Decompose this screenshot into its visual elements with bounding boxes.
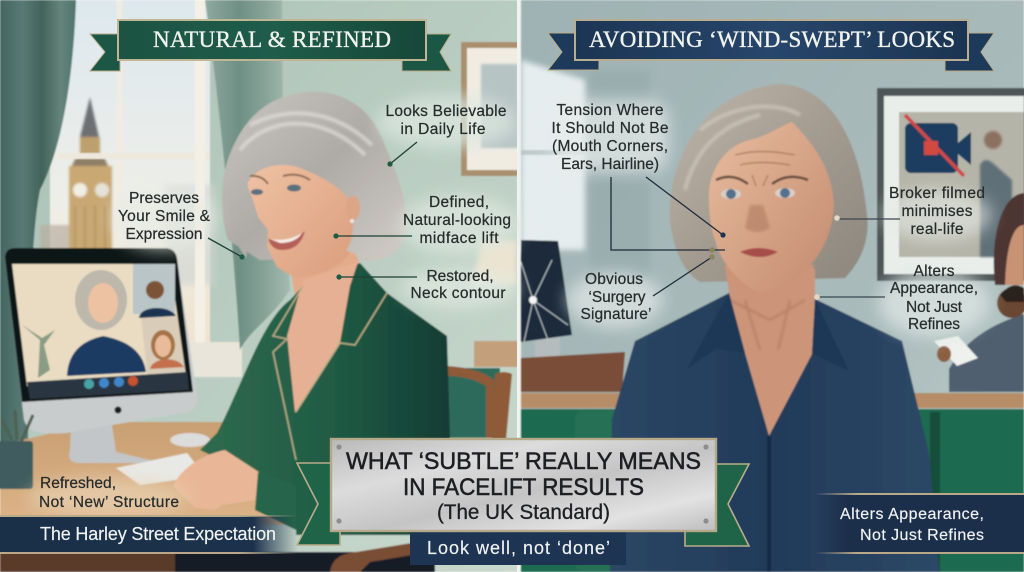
divider — [517, 0, 521, 572]
wooden rail — [521, 393, 1024, 408]
hair back — [670, 84, 868, 282]
navy shirt — [610, 293, 939, 572]
woman: natural result — [173, 92, 450, 535]
panel: natural and refined scene — [0, 0, 521, 572]
banner heading: NATURAL & REFINED — [153, 27, 391, 52]
label: surgery signature: Signature’ — [580, 306, 652, 323]
face — [246, 150, 361, 278]
chest skin — [287, 262, 358, 413]
label: neck contour: Neck contour — [410, 285, 506, 302]
label: surgery signature: ‘Surgery — [588, 289, 646, 306]
label: midface lift: Natural-looking — [403, 212, 511, 229]
main title: WHAT ‘SUBTLE’ REALLY MEANS — [346, 448, 701, 475]
chair back — [447, 366, 512, 440]
neck — [290, 245, 362, 330]
shirt collar — [687, 293, 849, 371]
panel: avoiding wind-swept scene — [521, 0, 1024, 572]
green sofa — [521, 409, 1024, 572]
eyes and brows — [716, 177, 808, 199]
label: surgery signature — [567, 254, 715, 328]
mouth — [740, 248, 778, 257]
icon: desktop monitor with video call — [5, 248, 197, 463]
label: tension: (Mouth Corners, — [552, 138, 668, 155]
label: broker filmed: Broker filmed — [889, 185, 985, 202]
bar: alters appearance — [815, 493, 1024, 554]
nose shadow — [745, 205, 770, 232]
placket — [767, 436, 771, 572]
woman: over-tight result — [610, 84, 939, 572]
hand resting on desk — [173, 450, 262, 510]
shirt cuff — [255, 472, 296, 530]
man with document — [934, 285, 1024, 392]
hair front — [223, 92, 405, 258]
call control buttons — [84, 376, 138, 389]
woman 2 on call — [150, 330, 184, 369]
label: broker filmed: minimises — [902, 203, 973, 220]
ribbon: right green — [685, 464, 749, 546]
video call screen — [12, 264, 189, 399]
window with London view — [40, 0, 242, 377]
label: preserves smile: Expression — [126, 226, 202, 243]
bar: alters appearance: Not Just Refines — [860, 527, 984, 544]
lapel trim — [273, 286, 387, 460]
ribbon: left green — [297, 463, 340, 545]
banner: avoiding wind-swept looks — [548, 20, 994, 71]
label: alters appearance: Alters — [914, 263, 955, 280]
label: neck contour — [336, 268, 518, 308]
label: alters appearance: Appearance, — [890, 280, 978, 297]
subtitle strip: look well, not done — [410, 529, 626, 565]
label: looks believable — [376, 96, 516, 167]
bar: the Harley Street expectation: The Harley Street Expectation — [40, 524, 276, 544]
label: tension: Tension Where — [556, 102, 664, 119]
label: tension: It Should Not Be — [552, 120, 668, 137]
label: alters appearance — [814, 263, 989, 337]
smile — [268, 231, 305, 250]
label: surgery signature: Obvious — [585, 271, 643, 288]
banner heading: AVOIDING ‘WIND-SWEPT’ LOOKS — [589, 27, 955, 52]
desk in background — [521, 352, 625, 392]
bar: the Harley Street expectation — [0, 515, 298, 554]
woman in background — [994, 193, 1024, 285]
label: looks believable: in Daily Life — [400, 121, 486, 138]
label: tension — [552, 100, 726, 253]
label: preserves smile: Preserves — [129, 190, 199, 207]
neck and chest — [725, 265, 815, 436]
table lamp and cabinet — [472, 240, 518, 367]
title plaque: IN FACELIFT RESULTS — [403, 474, 644, 501]
sub title: (The UK Standard) — [437, 501, 610, 524]
label: refreshed structure: Refreshed, — [40, 475, 116, 492]
wall right scene — [521, 0, 1024, 572]
label: alters appearance: Refines — [908, 316, 960, 333]
label: refreshed structure — [28, 475, 188, 517]
label: preserves smile: Your Smile & — [118, 208, 211, 225]
right curtain — [205, 0, 290, 350]
left curtain — [0, 0, 76, 445]
label: tension: Ears, Hairline) — [561, 156, 659, 173]
label: midface lift: midface lift — [420, 230, 499, 247]
icon: pen cup — [0, 410, 33, 489]
ear with earring — [346, 196, 360, 223]
cracked monitor — [521, 240, 572, 365]
label: refreshed structure: Not ‘New’ Structure — [39, 494, 179, 511]
woman on call — [67, 270, 146, 376]
logo dot — [114, 406, 122, 414]
label: midface lift: Defined, — [429, 194, 489, 211]
mouse — [170, 433, 210, 447]
framed picture with crossed camera — [877, 88, 1024, 281]
jacket — [200, 263, 450, 535]
desk — [0, 422, 290, 525]
bar: alters appearance: Alters Appearance, — [840, 506, 984, 523]
label: alters appearance: Not Just — [906, 299, 963, 316]
chair arm — [330, 540, 430, 572]
icon: crossed-out video camera — [905, 115, 971, 176]
label: neck contour: Restored, — [426, 268, 494, 285]
label: preserves smile — [112, 186, 245, 260]
eye and brow — [250, 175, 310, 195]
hair front — [670, 89, 865, 282]
title plaque — [331, 439, 716, 531]
hair back — [222, 92, 406, 261]
label: broker filmed — [834, 185, 991, 241]
window light — [521, 60, 650, 280]
label: broker filmed: real-life — [910, 221, 964, 238]
keyboard — [116, 453, 205, 485]
banner tails — [90, 34, 451, 71]
office plant on screen — [22, 325, 55, 378]
icon: Big Ben tower — [40, 97, 112, 265]
face — [709, 120, 834, 292]
frown lines — [735, 152, 795, 186]
framed picture — [461, 42, 521, 176]
wall left scene — [0, 0, 518, 572]
man on call — [139, 281, 176, 318]
label: midface lift — [333, 194, 520, 255]
figures in picture — [980, 131, 1012, 257]
subtitle strip: look well, not done: Look well, not ‘done’ — [427, 538, 610, 558]
plaque screws — [336, 444, 709, 524]
banner: natural and refined — [90, 20, 451, 71]
label: looks believable: Looks Believable — [386, 103, 506, 120]
banner tails — [548, 33, 994, 71]
